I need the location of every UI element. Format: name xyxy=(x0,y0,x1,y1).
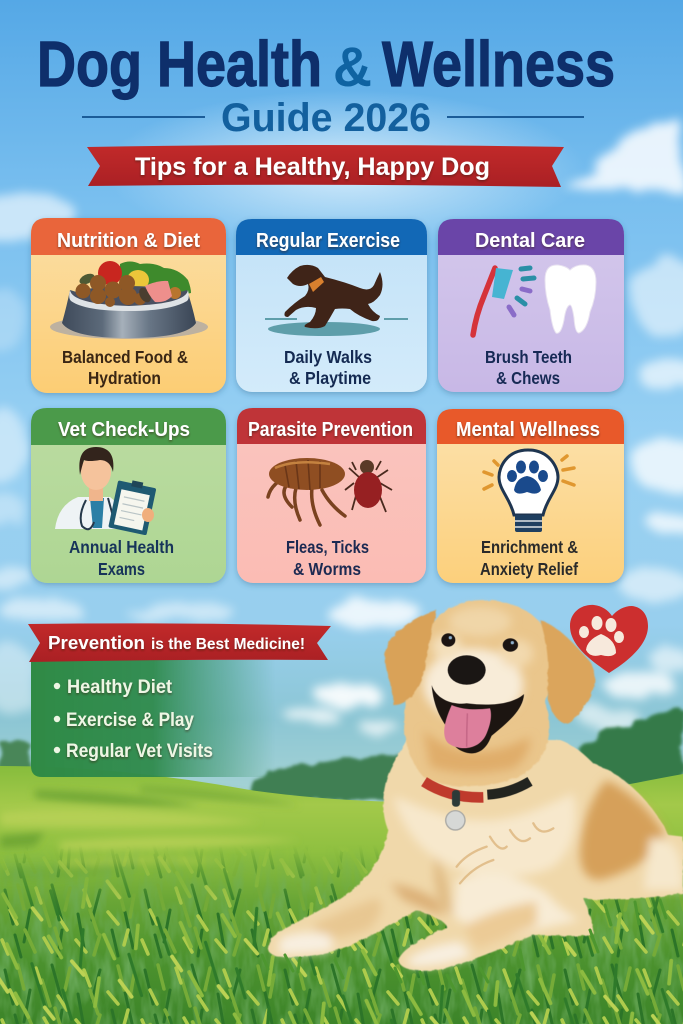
face highlights xyxy=(423,607,533,773)
checklist items: Exercise & Play xyxy=(66,709,194,731)
foreground grass blades xyxy=(0,840,683,1024)
panel: Vet Check-Ups: Exams xyxy=(98,559,145,579)
ears xyxy=(385,610,595,724)
panel: prevention checklist xyxy=(28,623,331,777)
panel: Mental Wellness: Anxiety Relief xyxy=(480,559,578,579)
dog body xyxy=(268,740,683,971)
panel: Nutrition & Diet xyxy=(31,218,226,393)
panel: Vet Check-Ups: Vet Check-Ups xyxy=(58,419,190,441)
subtitle: Guide 2026: Guide 2026 xyxy=(221,96,431,140)
panel: Nutrition & Diet: Balanced Food & xyxy=(62,347,188,367)
panel: Regular Exercise: Regular Exercise xyxy=(256,230,400,252)
clouds xyxy=(0,122,683,735)
nose xyxy=(448,655,486,685)
meadow light and dark bands xyxy=(0,786,300,882)
title xyxy=(37,28,615,100)
panel: Dental Care: Brush Teeth xyxy=(485,347,572,367)
eyes xyxy=(441,633,518,652)
checklist items: Regular Vet Visits xyxy=(66,740,213,762)
mouth and tongue xyxy=(432,685,524,753)
icon: heart with paw xyxy=(570,605,648,673)
panel: Regular Exercise: Daily Walks xyxy=(284,347,372,367)
ribbon: prevention banner: Prevention xyxy=(48,632,145,653)
icon: flea and tick xyxy=(268,458,392,525)
ribbon: tips banner: Tips for a Healthy, Happy Dog xyxy=(135,153,490,181)
checklist items: Healthy Diet xyxy=(67,676,172,698)
meadow xyxy=(0,766,683,1024)
panel: Dental Care: Dental Care xyxy=(475,230,585,252)
panel: Vet Check-Ups xyxy=(31,408,226,583)
ribbon: prevention banner xyxy=(28,623,331,662)
title: & xyxy=(333,35,372,98)
fur shading xyxy=(278,780,683,967)
golden retriever illustration xyxy=(268,600,683,971)
icon: food bowl xyxy=(50,261,208,339)
ribbon: tips banner xyxy=(87,145,564,187)
fur tufts on chest xyxy=(457,823,553,883)
ribbon: prevention banner: is the Best Medicine! xyxy=(151,636,305,653)
checklist items xyxy=(54,676,213,762)
panel: Nutrition & Diet: Hydration xyxy=(88,368,161,388)
panel: Mental Wellness xyxy=(437,409,624,583)
panel: Nutrition & Diet: Nutrition & Diet xyxy=(57,230,200,252)
panel: Parasite Prevention xyxy=(237,408,426,583)
panel: Parasite Prevention: & Worms xyxy=(293,559,361,579)
panel: Regular Exercise xyxy=(236,219,427,392)
panel: Mental Wellness: Enrichment & xyxy=(481,537,578,557)
panel: Mental Wellness: Mental Wellness xyxy=(456,419,600,441)
icon: running dog xyxy=(265,265,408,336)
title: Dog Health xyxy=(37,28,322,100)
icon: light bulb with paw xyxy=(484,450,574,532)
foreground grass over paws xyxy=(262,900,666,991)
panel: Vet Check-Ups: Annual Health xyxy=(69,537,174,557)
title: Wellness xyxy=(382,28,615,100)
collar and tag xyxy=(424,781,530,830)
panel: Parasite Prevention: Parasite Prevention xyxy=(248,419,413,441)
icon: veterinarian with clipboard xyxy=(55,447,157,535)
panel: Parasite Prevention: Fleas, Ticks xyxy=(286,537,369,557)
panel: Dental Care xyxy=(438,219,624,392)
icon: toothbrush and tooth xyxy=(473,265,596,335)
panel: Regular Exercise: & Playtime xyxy=(289,368,371,388)
tree line xyxy=(0,708,683,800)
head xyxy=(404,600,552,786)
panel: Dental Care: & Chews xyxy=(496,368,560,388)
